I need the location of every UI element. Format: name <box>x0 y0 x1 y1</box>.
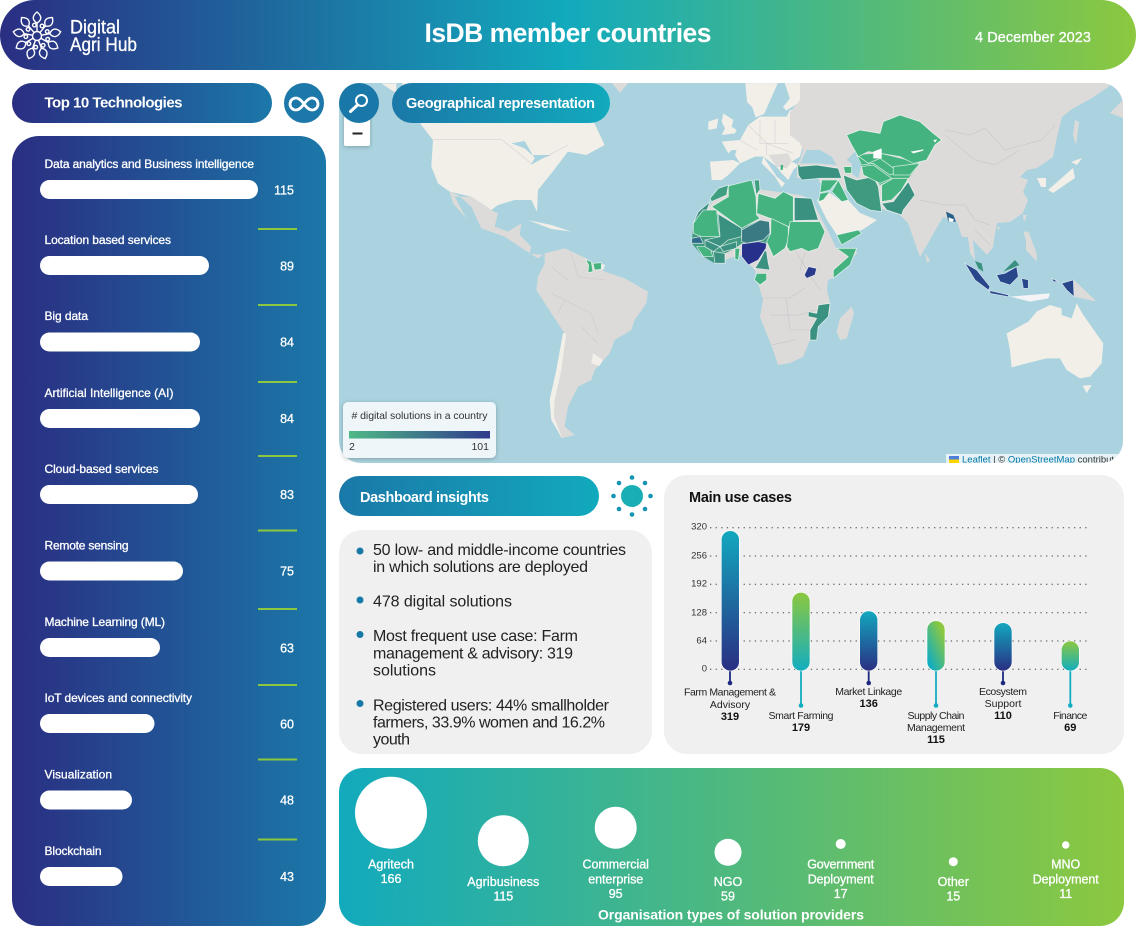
bar: Farm Management & Advisory <box>684 531 776 723</box>
bubble: Commercial enterprise <box>582 807 649 901</box>
icon: Digital Agri Hub logo <box>13 12 62 61</box>
insight: solutions: 478 digital solutions <box>373 594 512 610</box>
map zoom control <box>344 110 370 146</box>
heading: dashboard insights <box>339 476 599 516</box>
heading: top 10 technologies <box>12 83 272 123</box>
insight: registered users <box>356 698 610 748</box>
panel: dashboard insights <box>339 530 652 754</box>
chart axis: 192 <box>691 578 707 590</box>
chart axis: 128 <box>691 608 707 618</box>
map land: Americas <box>381 80 648 438</box>
bubble: Government Deployment: Deployment <box>808 872 874 886</box>
row: Cloud-based services: 83 <box>280 488 294 502</box>
row: Data analytics and Business intelligence: Data analytics and Business intelligence <box>44 157 254 171</box>
heading: dashboard insights: Dashboard insights <box>360 490 489 506</box>
row: Remote sensing: Remote sensing <box>44 538 128 552</box>
bubble: MNO Deployment: 11 <box>1059 887 1072 901</box>
bar: Ecosystem Support <box>979 623 1027 722</box>
map land: Scandinavia and Finland <box>745 83 802 117</box>
bar: Finance: 69 <box>1064 722 1076 734</box>
map land: Europe <box>708 110 803 187</box>
map land: Greenland tip <box>612 83 628 93</box>
bar: Supply Chain Management: Management <box>907 722 965 734</box>
bubble: MNO Deployment: MNO <box>1051 858 1081 872</box>
map attribution: Leaflet | © OpenStreetMap contributors <box>962 454 1128 466</box>
row: Big data: 84 <box>280 336 294 350</box>
map land: Asia and Eastern Europe <box>790 83 1123 272</box>
bubble: Government Deployment: 17 <box>834 887 848 901</box>
bar: Finance: Finance <box>1053 710 1087 722</box>
insight: registered users: farmers, 33.9% women and 16.2% <box>373 714 605 732</box>
bar: Farm Management & Advisory: Advisory <box>710 699 751 711</box>
bubble: Agritech: 166 <box>381 872 401 886</box>
map: member countries Africa and Middle East <box>692 115 942 340</box>
row: Artificial Intelligence (AI): Artificial Intelligence (AI) <box>44 386 174 400</box>
chart axis: 320 <box>691 522 707 532</box>
bar: Supply Chain Management: Supply Chain <box>908 710 965 722</box>
row: Remote sensing: 75 <box>280 564 294 578</box>
heading: geographical representation <box>392 83 610 123</box>
bar: Smart Farming: Smart Farming <box>768 710 834 722</box>
row: Blockchain: 43 <box>280 870 294 884</box>
row: Cloud-based services: Cloud-based services <box>44 462 158 476</box>
map legend: # digital solutions in a country <box>352 410 488 422</box>
row: Location based services <box>40 233 294 275</box>
bubble: Other: 15 <box>946 890 960 904</box>
logo wordmark: Digital <box>70 16 120 38</box>
panel: organisation types <box>339 768 1124 926</box>
bar: Market Linkage: Market Linkage <box>835 686 902 698</box>
insight: use case: Most frequent use case: Farm <box>373 628 578 645</box>
bubble: Government Deployment <box>807 839 875 901</box>
insight: use case <box>356 628 578 680</box>
bar: Ecosystem Support: Ecosystem <box>979 686 1027 698</box>
insight: registered users: youth <box>373 732 410 748</box>
bubble: Other: Other <box>938 875 969 889</box>
row: Machine Learning (ML) <box>40 615 294 657</box>
logo wordmark: Agri Hub <box>70 34 137 56</box>
bar: Farm Management & Advisory: Farm Management & <box>684 686 776 698</box>
icon: magnifier <box>339 83 379 123</box>
icon: infinity <box>284 83 324 123</box>
map legend: 2 <box>349 441 355 453</box>
panel: technologies bar list <box>12 136 326 926</box>
bubble: Commercial enterprise: enterprise <box>588 872 643 886</box>
map legend: 101 <box>471 441 489 453</box>
bubble: NGO: 59 <box>721 890 735 904</box>
chart axis: 64 <box>696 636 707 646</box>
map land: Arabia, Korea, Japan <box>817 158 1082 235</box>
bar: Farm Management & Advisory: 319 <box>721 711 739 723</box>
insight: countries <box>356 542 626 576</box>
heading: top 10 technologies: Top 10 Technologies <box>44 94 182 112</box>
map legend <box>343 402 496 458</box>
bubble: MNO Deployment: Deployment <box>1033 872 1099 886</box>
row: Big data <box>40 309 294 352</box>
bubble: Agritech <box>355 777 427 886</box>
row: Cloud-based services <box>40 462 294 504</box>
insight: use case: solutions <box>373 662 436 680</box>
row: Data analytics and Business intelligence: 115 <box>274 184 294 198</box>
map attribution <box>946 454 1118 463</box>
bar: Smart Farming <box>768 592 834 734</box>
bubble: Agribusiness <box>467 815 539 904</box>
row: IoT devices and connectivity: IoT devices and connectivity <box>44 691 192 705</box>
row: Big data: Big data <box>44 309 88 323</box>
row: Blockchain <box>40 844 294 886</box>
insight: countries: 50 low- and middle-income countries <box>373 542 626 559</box>
insight: use case: management & advisory: 319 <box>373 646 573 662</box>
icon: sun <box>611 475 653 517</box>
bubble: Agribusiness: Agribusiness <box>467 875 539 889</box>
bubble: NGO <box>714 839 743 904</box>
bar: Smart Farming: 179 <box>792 722 810 734</box>
panel caption: Organisation types of solution providers <box>598 906 864 922</box>
row: Visualization: Visualization <box>44 768 112 782</box>
heading: geographical representation: Geographical representation <box>406 96 595 112</box>
row: Machine Learning (ML): Machine Learning (ML) <box>44 615 165 629</box>
row: IoT devices and connectivity: 60 <box>280 718 294 732</box>
date: 4 December 2023 <box>975 30 1091 46</box>
bar: Ecosystem Support: Support <box>985 698 1021 710</box>
panel: main use cases chart <box>664 475 1124 754</box>
bar: Market Linkage <box>835 611 902 710</box>
bubble: NGO: NGO <box>714 875 743 889</box>
logo wordmark <box>70 16 137 56</box>
bubble: Other <box>938 857 969 904</box>
bubble: Government Deployment: Government <box>807 858 875 872</box>
row: Artificial Intelligence (AI): 84 <box>280 412 294 426</box>
row: Machine Learning (ML): 63 <box>280 642 294 656</box>
bubble: Commercial enterprise: Commercial <box>582 858 649 872</box>
map land: Sri Lanka, Taiwan, Hainan <box>925 215 1027 263</box>
bar: Market Linkage: 136 <box>860 698 878 710</box>
title: IsDB member countries <box>424 18 712 48</box>
bar: Finance <box>1053 641 1087 734</box>
map land: Australia, Tasmania, Madagascar <box>837 303 1103 393</box>
row: Visualization: 48 <box>280 794 294 808</box>
map: member countries South and Southeast Asia <box>946 212 1097 302</box>
bubble: Agribusiness: 115 <box>493 890 513 904</box>
map water: Black Sea and Caspian Sea <box>800 150 862 178</box>
bubble: Agritech: Agritech <box>368 858 414 872</box>
map land: Kamchatka, Sakhalin, Philippines <box>1026 100 1123 262</box>
row: Blockchain: Blockchain <box>44 844 102 858</box>
row: Artificial Intelligence (AI) <box>40 386 294 428</box>
chart axis: 0 <box>702 664 707 674</box>
map: world choropleth <box>339 80 1128 466</box>
row: Remote sensing <box>40 538 294 580</box>
map land: Africa <box>692 185 857 365</box>
header banner <box>0 0 1136 70</box>
bar: Supply Chain Management: 115 <box>927 734 945 746</box>
chart title: Main use cases <box>689 490 792 506</box>
bar: Supply Chain Management <box>907 621 965 746</box>
row: Location based services: Location based services <box>44 233 171 247</box>
bar: Ecosystem Support: 110 <box>994 710 1012 722</box>
row: Data analytics and Business intelligence <box>40 157 294 199</box>
row: IoT devices and connectivity <box>40 691 294 733</box>
chart axis <box>691 522 1087 674</box>
bubble: Commercial enterprise: 95 <box>609 887 623 901</box>
bubble: MNO Deployment <box>1033 841 1099 901</box>
insight: registered users: Registered users: 44% smallholder <box>373 698 610 714</box>
insight: countries: in which solutions are deployed <box>373 559 588 576</box>
chart axis: 256 <box>691 550 707 562</box>
row: Location based services: 89 <box>280 260 294 274</box>
row: Visualization <box>40 768 294 810</box>
